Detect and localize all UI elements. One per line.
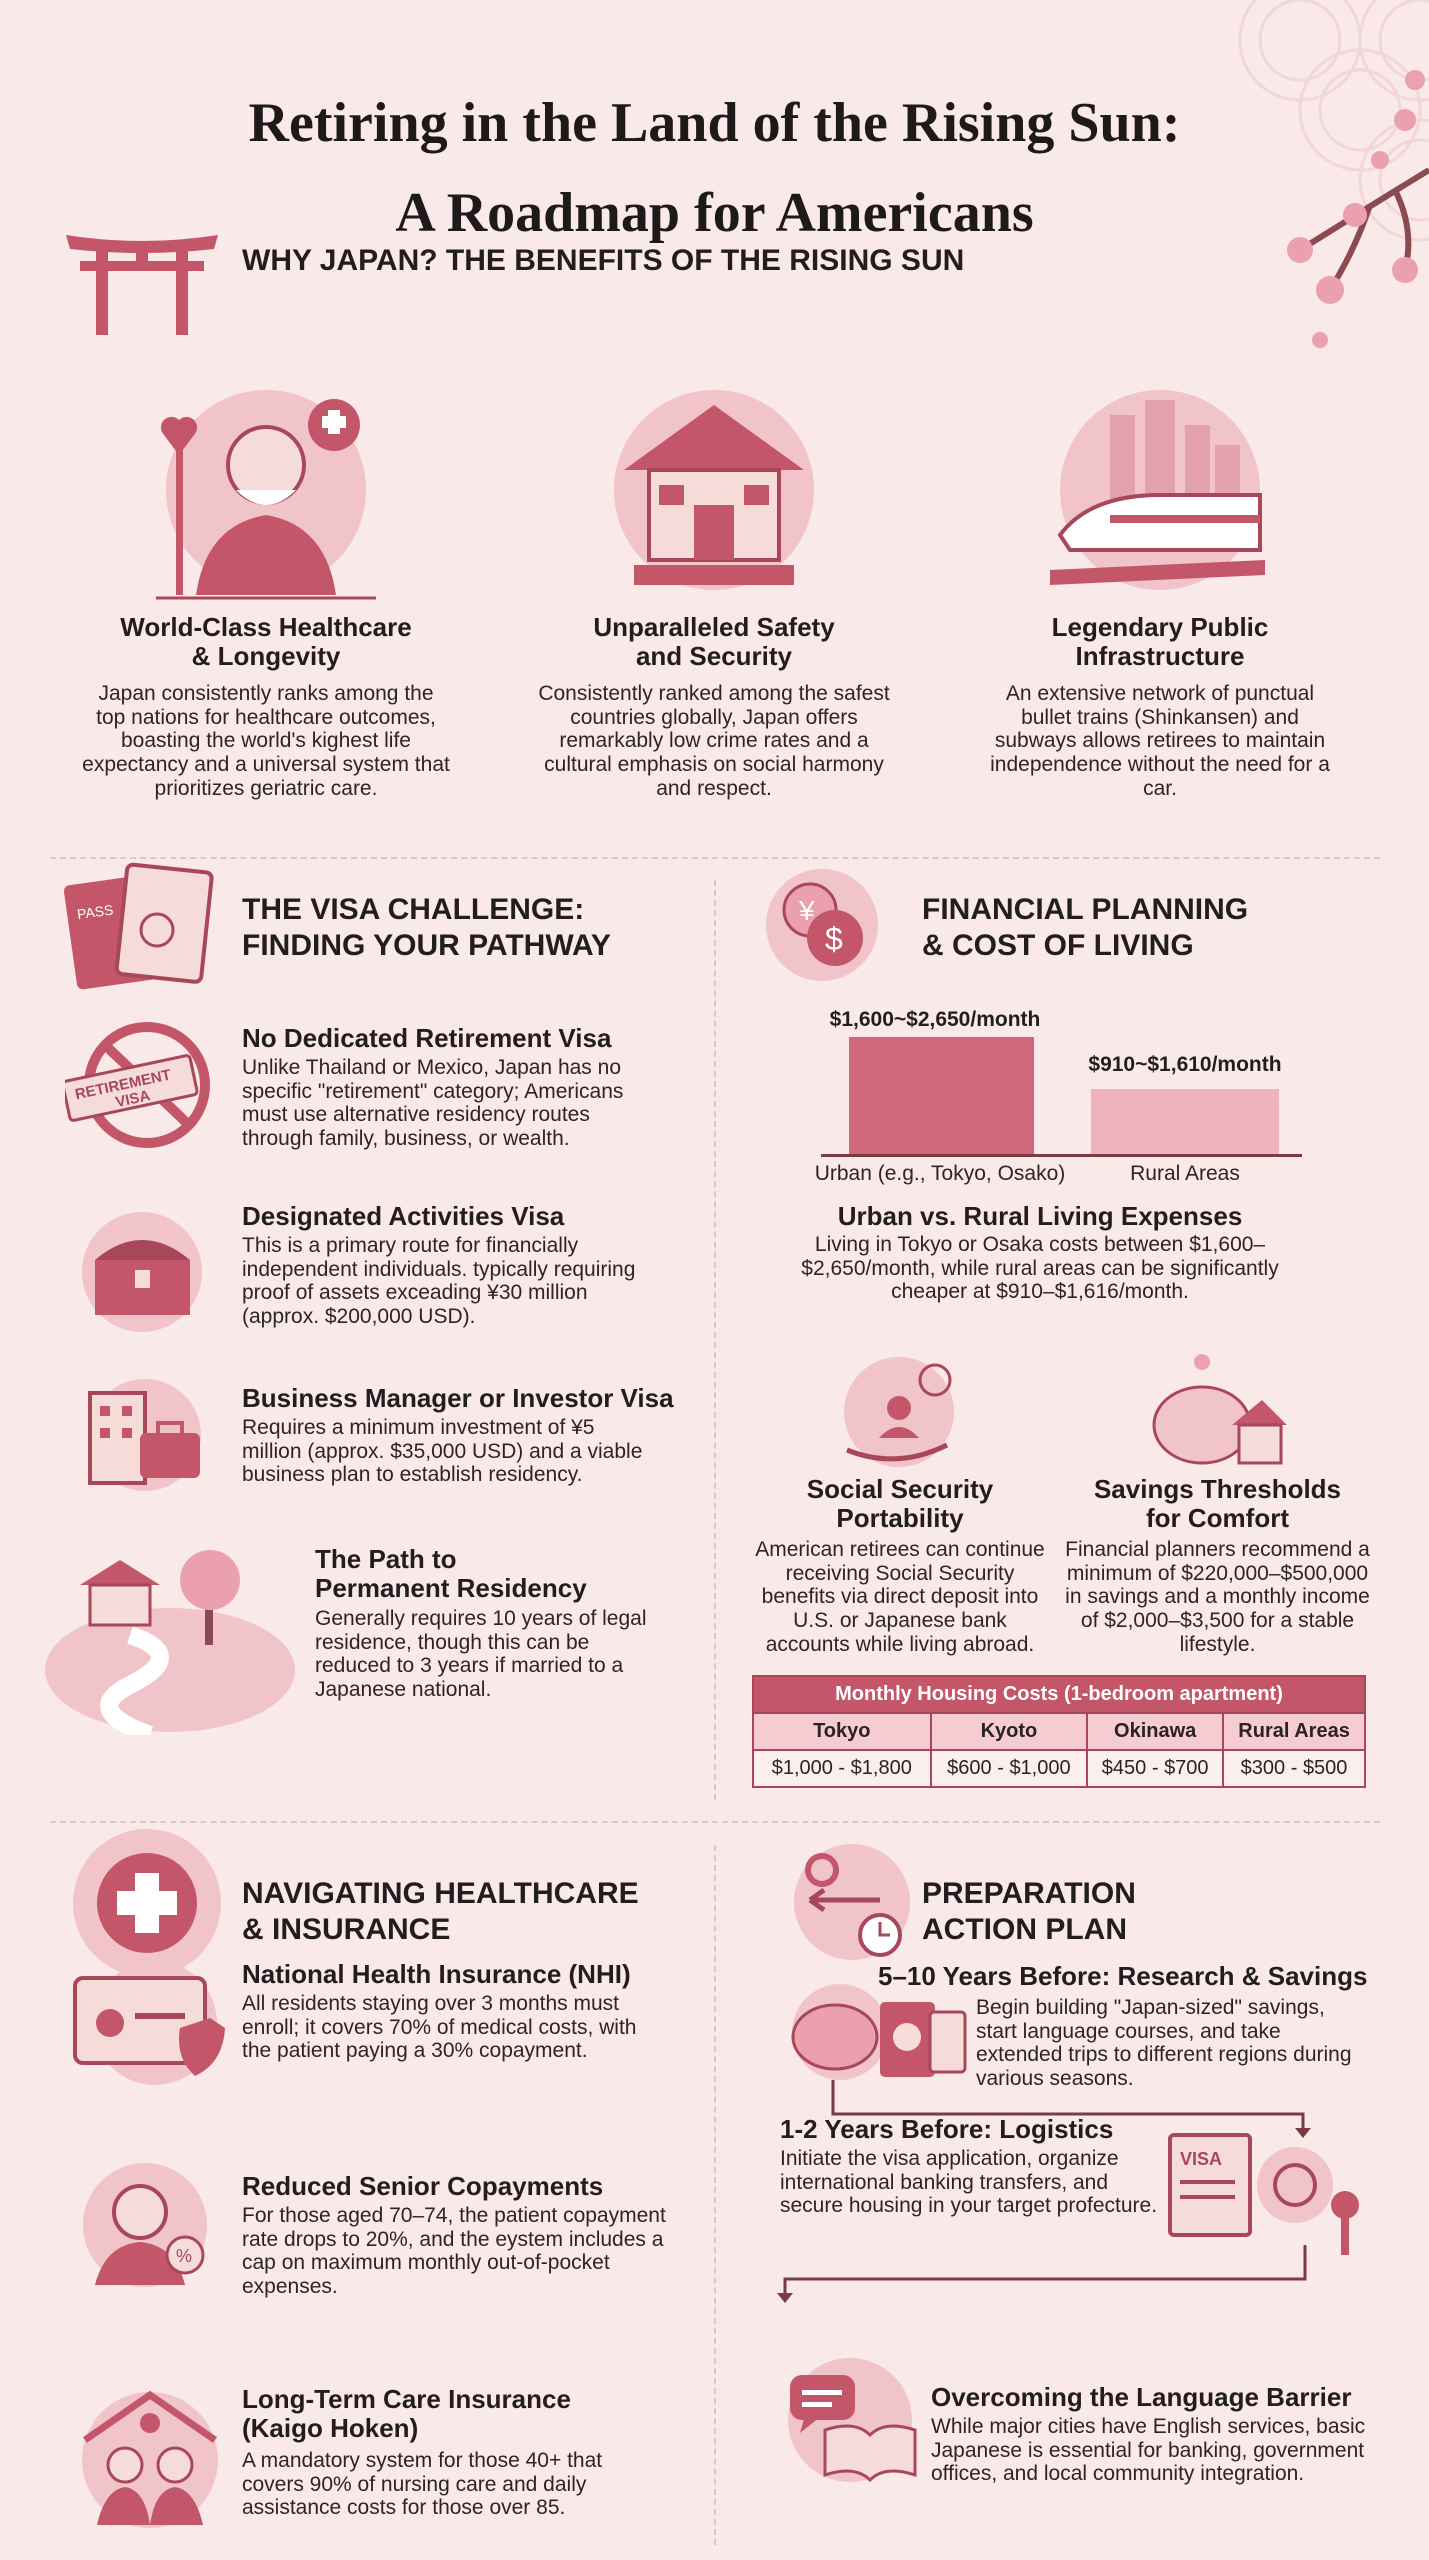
table: monthly housing costs: Rural Areas [1238, 1720, 1350, 1742]
icon: senior woman [83, 2163, 207, 2287]
step: 5-10 years [780, 1962, 1380, 2082]
section heading: healthcare: NAVIGATING HEALTHCARE [242, 1877, 639, 1910]
heading [242, 2385, 571, 2443]
icon: medical cross [73, 1829, 221, 1972]
body: This is a primary route for financially independent individuals. typically requiring proof of assets exceading ¥30 million (approx. $200,000 USD). [242, 1234, 635, 1328]
heading: Legendary Public [1052, 612, 1268, 642]
body: Initiate the visa application, organize international banking transfers, and secure housing in your target profecture. [780, 2147, 1157, 2217]
heading: & Longevity [192, 641, 340, 671]
icon: torii gate [66, 235, 218, 335]
icon: visa documents and keys [1165, 2115, 1375, 2265]
heading: (Kaigo Hoken) [242, 2413, 418, 2443]
body: Requires a minimum investment of ¥5 million (approx. $35,000 USD) and a viable business plan to establish residency. [242, 1416, 642, 1486]
section heading: preparation: ACTION PLAN [922, 1913, 1127, 1946]
body: A mandatory system for those 40+ that covers 90% of nursing care and daily assistance costs for those over 85. [242, 2449, 602, 2519]
icon: passports [64, 862, 214, 990]
body: Generally requires 10 years of legal residence, though this can be reduced to 3 years if married to a Japanese national. [315, 1607, 647, 1701]
section heading: visa challenge: FINDING YOUR PATHWAY [242, 929, 611, 962]
heading: Portability [836, 1503, 964, 1533]
icon: bullet train [1050, 390, 1265, 590]
heading: 5–10 Years Before: Research & Savings [878, 1961, 1367, 1991]
heading: Overcoming the Language Barrier [931, 2382, 1351, 2412]
panel: healthcare benefit [82, 390, 450, 800]
title: Retiring in the Land of the Rising Sun: [249, 92, 1180, 154]
icon: insurance card [73, 1968, 225, 2085]
item: no retirement visa [65, 1022, 623, 1150]
heading: World-Class Healthcare [120, 612, 412, 642]
section heading: financial planning [922, 893, 1248, 962]
item: business visa [88, 1379, 674, 1491]
body text: Consistently ranked among the safest countries globally, Japan offers remarkably low crime rates and a cultural emphasis on social harmony and respect. [538, 682, 890, 800]
heading: Social Security [807, 1474, 993, 1504]
item: permanent residency [45, 1544, 647, 1735]
decoration: cherry blossom pattern [1238, 0, 1429, 348]
heading: No Dedicated Retirement Visa [242, 1023, 611, 1053]
table: monthly housing costs: $450 - $700 [1102, 1757, 1209, 1779]
icon: yen dollar coins: ¥ [798, 895, 815, 926]
bar chart: urban vs rural: $910~$1,610/month [1088, 1053, 1282, 1076]
icon: gears and clock [790, 1840, 915, 1965]
item: social security [755, 1357, 1045, 1656]
icon: piggy bank and house [1152, 1354, 1287, 1464]
icon: path landscape [45, 1550, 295, 1735]
item: reduced copayments [83, 2163, 666, 2298]
bar chart: urban vs rural [815, 1008, 1302, 1185]
section heading: healthcare: & INSURANCE [242, 1913, 450, 1946]
body: For those aged 70–74, the patient copayment rate drops to 20%, and the eystem includes a cap on maximum monthly out-of-pocket expenses. [242, 2204, 666, 2298]
heading: Business Manager or Investor Visa [242, 1383, 674, 1413]
table: monthly housing costs: Okinawa [1114, 1720, 1196, 1742]
table: monthly housing costs: Monthly Housing Costs (1-bedroom apartment) [835, 1683, 1283, 1705]
heading: Designated Activities Visa [242, 1201, 564, 1231]
heading: Long-Term Care Insurance [242, 2384, 571, 2414]
body: Unlike Thailand or Mexico, Japan has no specific "retirement" category; Americans must use alternative residency routes through family, business, or wealth. [242, 1056, 623, 1150]
heading: 1-2 Years Before: Logistics [780, 2114, 1113, 2144]
section heading: healthcare [242, 1877, 639, 1946]
table: monthly housing costs: $600 - $1,000 [947, 1757, 1071, 1779]
heading: and Security [636, 641, 792, 671]
icon: temple [614, 390, 814, 590]
section heading: visa challenge [242, 893, 611, 962]
icon: hand globe [844, 1357, 954, 1467]
icon: passports: PASS [76, 901, 114, 922]
heading [1094, 1474, 1341, 1533]
icon: prohibited sign: RETIREMENT [73, 1066, 172, 1103]
icon: senior woman: % [176, 2246, 192, 2266]
bar chart: urban vs rural: $1,600~$2,650/month [830, 1008, 1040, 1031]
heading: Savings Thresholds [1094, 1474, 1341, 1504]
body: urban vs rural: Living in Tokyo or Osaka costs between $1,600–$2,650/month, while rural areas can be significantly cheaper at $910–$1,616/month. [801, 1233, 1279, 1303]
icon: prohibited sign: VISA [114, 1087, 152, 1111]
section heading: preparation: PREPARATION [922, 1877, 1136, 1910]
icon: prohibited sign [65, 1022, 210, 1148]
body: American retirees can continue receiving Social Security benefits via direct deposit into U.S. or Japanese bank accounts while living abroad. [755, 1538, 1045, 1656]
heading: National Health Insurance (NHI) [242, 1959, 631, 1989]
icon: building and briefcase [88, 1379, 201, 1491]
step: language barrier [780, 2355, 1380, 2495]
heading: Permanent Residency [315, 1573, 587, 1603]
table: monthly housing costs: Kyoto [981, 1720, 1037, 1742]
heading: Unparalleled Safety [593, 612, 835, 642]
item: designated activities [82, 1201, 635, 1332]
table: monthly housing costs [752, 1675, 1366, 1788]
heading: urban vs rural: Urban vs. Rural Living Expenses [838, 1201, 1242, 1231]
icon: couple house [75, 2385, 225, 2535]
section heading: financial planning: & COST OF LIVING [922, 929, 1194, 962]
table: monthly housing costs: $300 - $500 [1241, 1757, 1347, 1779]
body: Financial planners recommend a minimum of $220,000–$500,000 in savings and a monthly income of $2,000–$3,500 for a stable lifestyle. [1065, 1538, 1370, 1656]
heading [807, 1474, 993, 1533]
icon: treasure chest [82, 1212, 202, 1332]
section heading: preparation [922, 1876, 1136, 1948]
heading: for Comfort [1146, 1503, 1289, 1533]
table: monthly housing costs: Tokyo [813, 1720, 870, 1742]
item: savings thresholds [1065, 1354, 1370, 1656]
body: While major cities have English services, basic Japanese is essential for banking, government offices, and local community integration. [931, 2415, 1365, 2485]
icon: yen dollar coins: $ [825, 921, 843, 957]
icon: speech bubble and book [780, 2355, 920, 2485]
icon: elderly man [156, 390, 376, 600]
body text: Japan consistently ranks among the top nations for healthcare outcomes, boasting the world's kighest life expectancy and a universal system that prioritizes geriatric care. [82, 682, 450, 800]
arrow: connector 1 [825, 2080, 1315, 2140]
bar chart: urban vs rural: Urban (e.g., Tokyo, Osako) [815, 1162, 1065, 1185]
panel: infrastructure benefit [990, 390, 1330, 800]
body: Begin building "Japan-sized" savings, start language courses, and take extended trips to different regions during various seasons. [976, 1996, 1352, 2090]
icon: yen dollar coins [766, 869, 878, 981]
section heading: financial planning: FINANCIAL PLANNING [922, 893, 1248, 926]
bar chart: urban vs rural: Rural Areas [1130, 1162, 1240, 1185]
section heading: why japan: WHY JAPAN? THE BENEFITS OF THE RISING SUN [242, 244, 964, 277]
heading: Infrastructure [1075, 641, 1245, 671]
item: NHI [73, 1959, 636, 2085]
title: A Roadmap for Americans [395, 182, 1034, 244]
step: 1-2 years [780, 2115, 1380, 2265]
icon: piggy bank and passport [780, 1982, 975, 2082]
heading [593, 612, 835, 671]
panel: safety benefit [538, 390, 890, 800]
section heading: visa challenge: THE VISA CHALLENGE: [242, 893, 584, 926]
heading [315, 1544, 587, 1603]
icon: visa documents and keys: VISA [1180, 2149, 1222, 2169]
body text: An extensive network of punctual bullet trains (Shinkansen) and subways allows retirees to maintain independence without the need for a car. [990, 682, 1330, 800]
heading [120, 612, 412, 671]
body: All residents staying over 3 months must enroll; it covers 70% of medical costs, with the patient paying a 30% copayment. [242, 1992, 636, 2062]
table: monthly housing costs: $1,000 - $1,800 [772, 1757, 912, 1779]
arrow: connector 2 [775, 2245, 1315, 2305]
heading [1052, 612, 1268, 671]
heading: Reduced Senior Copayments [242, 2171, 603, 2201]
heading: The Path to [315, 1544, 457, 1574]
title [249, 92, 1180, 244]
item: long-term care [82, 2384, 602, 2528]
